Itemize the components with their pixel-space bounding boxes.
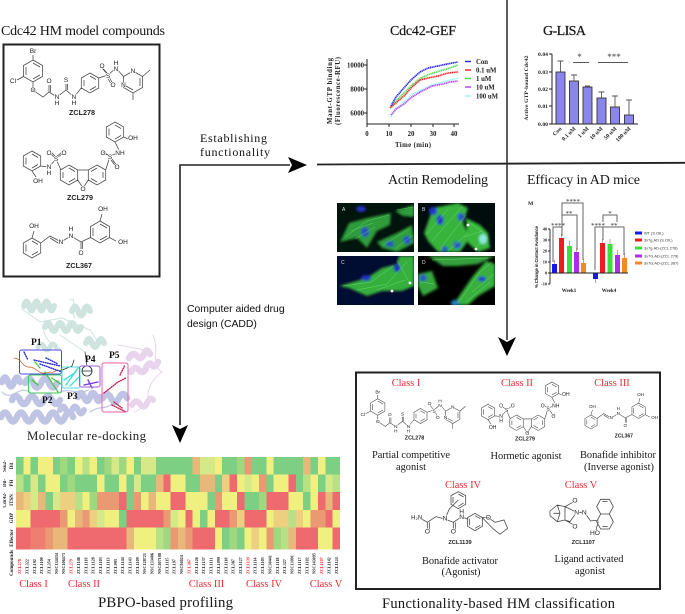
compound labels: ZCL1111 bbox=[208, 558, 214, 574]
class II: O bbox=[499, 403, 503, 409]
axis labels: 10 uM bbox=[589, 126, 605, 141]
class II: O bbox=[525, 431, 529, 437]
axes bbox=[548, 229, 628, 284]
panel: Actin Remodeling micrographs bbox=[337, 173, 495, 306]
compound labels: ZCL197 bbox=[172, 559, 177, 574]
heading: Actin Remodeling: Actin Remodeling bbox=[388, 173, 488, 188]
compound labels: ZCL1139 bbox=[245, 557, 250, 574]
protein ribbons: lower domain bbox=[1, 378, 127, 422]
molecule: ZCL279: OH bbox=[33, 178, 43, 185]
panel: functionality-based HM classification bbox=[356, 372, 660, 612]
compound labels: ZCL1118 bbox=[275, 557, 280, 574]
compound labels: NSC134434 bbox=[54, 552, 59, 574]
molecule: ZCL278: O bbox=[110, 82, 116, 89]
pocket labels: P3 bbox=[67, 392, 78, 402]
class V: N bbox=[582, 510, 587, 517]
axis labels: 10 bbox=[386, 131, 393, 138]
legend: 3x7G.AD-(ZCL 279) bbox=[644, 254, 679, 258]
molecule: ZCL278: H bbox=[72, 100, 77, 107]
class II: N bbox=[499, 414, 503, 420]
class I: Br bbox=[375, 390, 381, 396]
pocket P5 bbox=[102, 363, 128, 412]
protein ribbons: right domain bbox=[118, 335, 162, 412]
class V: O bbox=[572, 523, 578, 530]
caption: PBPO-based profiling: PBPO-based profiling bbox=[98, 595, 234, 611]
axis labels: Week4 bbox=[602, 289, 617, 294]
molecule: ZCL278: H bbox=[55, 100, 60, 107]
heading: G-LISA: G-LISA bbox=[543, 24, 587, 39]
micrograph D bbox=[418, 256, 495, 305]
heatmap row labels: Effector bbox=[10, 528, 15, 547]
class III: N bbox=[610, 415, 613, 420]
class IV: Bonafide activator bbox=[422, 556, 499, 567]
compound labels: ZCL279 bbox=[69, 559, 74, 574]
compound labels: NSC407188 bbox=[157, 553, 162, 574]
axis labels bbox=[534, 225, 617, 294]
class II: S bbox=[546, 406, 550, 412]
micrograph A: A bbox=[342, 207, 346, 213]
divider lines and downward arrow bbox=[317, 0, 685, 356]
panel: Cdc42 HM model compounds bbox=[1, 24, 165, 276]
molecule: ZCL367: OH bbox=[118, 239, 128, 246]
caption: Functionality-based HM classification: Functionality-based HM classification bbox=[382, 596, 615, 612]
compound labels: ZCL1115 bbox=[164, 557, 169, 574]
molecule: ZCL279: O bbox=[46, 150, 52, 157]
molecule: ZCL279: O bbox=[100, 150, 106, 157]
pocket labels: P2 bbox=[42, 396, 53, 406]
molecule: ZCL278: O bbox=[30, 87, 36, 94]
molecule: ZCL278: S bbox=[64, 77, 69, 84]
compound labels: ZCL1127 bbox=[238, 557, 243, 574]
compound labels: ZCL1128 bbox=[91, 557, 96, 574]
class V: agonist bbox=[575, 566, 605, 577]
molecule: ZCL278: N bbox=[55, 94, 60, 101]
compound labels: NSC13991 bbox=[290, 555, 295, 574]
legend: 3x7g.AD-(ZCL 278) bbox=[644, 246, 678, 250]
compound labels: ZCL327 bbox=[282, 559, 287, 574]
compound labels: ZCL192 bbox=[32, 559, 37, 574]
class I: N bbox=[438, 403, 442, 409]
compound labels: ZCL1109 bbox=[135, 557, 140, 574]
class III: Bonafide inhibitor bbox=[580, 450, 657, 461]
legend bbox=[465, 59, 499, 100]
axis labels: 0 bbox=[365, 131, 369, 138]
heatmap row labels bbox=[3, 460, 15, 576]
pocket labels: P4 bbox=[85, 355, 96, 365]
class IV: O bbox=[425, 528, 430, 535]
pocket P3 bbox=[62, 367, 80, 388]
compound labels: ZCL1114 bbox=[253, 557, 258, 574]
class V: N bbox=[574, 510, 579, 517]
compound labels: ZCL1119 bbox=[83, 557, 88, 574]
class II: Class II bbox=[501, 378, 534, 389]
class I: agonist bbox=[396, 462, 426, 473]
micrograph A bbox=[337, 203, 414, 252]
axis labels: 0 bbox=[545, 270, 547, 276]
compound labels: ZCL354 bbox=[46, 558, 52, 574]
class I: N bbox=[451, 405, 455, 411]
molecule: ZCL279 bbox=[23, 122, 138, 202]
molecule: ZCL279: H bbox=[47, 170, 52, 177]
heading: model compounds: Cdc42 HM model compounds bbox=[1, 24, 165, 39]
legend bbox=[635, 230, 679, 266]
compound labels: NSC133406 bbox=[150, 553, 155, 574]
compound labels: ZCL1102 bbox=[304, 557, 309, 574]
molecule: ZCL278: N bbox=[114, 66, 119, 73]
axis labels: 30 bbox=[430, 131, 437, 138]
class IV: H bbox=[459, 508, 464, 515]
significance brackets: **** bbox=[551, 222, 566, 230]
class I: O bbox=[376, 419, 380, 425]
axis labels: 6000 bbox=[350, 110, 365, 118]
label: computer aided drug design: design (CADD) bbox=[187, 319, 257, 330]
axis labels: 40 bbox=[451, 131, 458, 138]
axis labels: Week1 bbox=[562, 289, 577, 294]
compound labels: ZCL1124 bbox=[334, 556, 339, 574]
axis labels: (Fluorescence-RFU) bbox=[335, 57, 342, 125]
class IV: N bbox=[459, 514, 464, 521]
micrograph B bbox=[418, 203, 495, 252]
heatmap row labels: GDP bbox=[10, 513, 15, 523]
molecule: ZCL279: S bbox=[108, 154, 113, 161]
class I: Cl bbox=[360, 412, 365, 418]
pocket P1 bbox=[20, 350, 62, 374]
molecule: ZCL367: ZCL367 bbox=[66, 261, 92, 270]
molecule: ZCL279: O bbox=[114, 164, 120, 171]
compound labels: ZCL278 bbox=[17, 559, 22, 574]
class V bbox=[550, 480, 624, 577]
class IV: (Agonist) bbox=[442, 567, 480, 578]
compound labels: ZCL1113 bbox=[105, 557, 110, 574]
class V: ZCL1107 bbox=[572, 540, 595, 546]
class III: OH bbox=[637, 392, 644, 397]
molecule: ZCL367: H bbox=[69, 226, 74, 233]
compound labels: NSC30441 bbox=[268, 555, 272, 574]
class III: (Inverse agonist) bbox=[584, 462, 654, 473]
molecule: ZCL278: O bbox=[99, 63, 105, 70]
micrograph D: D bbox=[422, 260, 426, 266]
compound labels: NSC143095 bbox=[312, 553, 317, 574]
compound labels: ZCL1144 bbox=[120, 556, 125, 574]
molecule: ZCL278: Cl bbox=[10, 78, 17, 85]
axis labels: 1 uM bbox=[577, 126, 591, 139]
significance brackets bbox=[551, 198, 624, 270]
class II bbox=[481, 378, 570, 462]
class labels bbox=[19, 579, 343, 590]
class III: OH bbox=[589, 404, 596, 409]
class I: Partial competitive bbox=[372, 450, 450, 461]
axis labels: Time (min) bbox=[395, 142, 431, 149]
compound box frame bbox=[4, 44, 160, 276]
binding site ligand dots bbox=[14, 352, 126, 412]
axis labels: 8000 bbox=[350, 86, 365, 94]
axis labels: 0.01 bbox=[538, 104, 548, 110]
class II: NH bbox=[552, 403, 560, 409]
molecule: ZCL279: N bbox=[47, 164, 52, 171]
molecule: ZCL279: OH bbox=[128, 135, 138, 142]
axis labels: 10000 bbox=[347, 62, 365, 70]
axis labels: Con bbox=[552, 126, 564, 138]
arrow: establishing functionality bbox=[172, 157, 307, 443]
curves bbox=[390, 62, 458, 117]
significance brackets: ** bbox=[610, 222, 618, 230]
significance brackets: * bbox=[608, 210, 612, 218]
pocket labels: P5 bbox=[109, 351, 120, 361]
axis labels: 20 bbox=[543, 248, 547, 254]
axis labels: 50 uM bbox=[603, 126, 619, 141]
class IV: ZCL1139 bbox=[448, 540, 472, 546]
molecule: ZCL279: O bbox=[80, 186, 86, 193]
pocket P4 bbox=[80, 366, 100, 387]
bars bbox=[556, 72, 634, 124]
protein ribbons: top domain bbox=[22, 299, 104, 352]
molecule: ZCL367: N bbox=[69, 233, 74, 240]
molecule: ZCL367: O bbox=[78, 250, 84, 257]
caption: Molecular re-docking: Molecular re-docking bbox=[27, 429, 147, 443]
panel: molecular re-docking protein structure bbox=[1, 299, 162, 443]
significance markers: * bbox=[577, 52, 582, 62]
class III bbox=[580, 378, 658, 473]
class IV: N bbox=[443, 515, 448, 522]
class I: O bbox=[388, 412, 392, 418]
class V: HO bbox=[590, 530, 600, 537]
axis labels bbox=[327, 57, 458, 149]
class III: Class III bbox=[594, 378, 630, 389]
class IV: O bbox=[451, 528, 456, 535]
class I: H bbox=[438, 399, 442, 405]
class IV bbox=[411, 480, 508, 578]
legend: 1 uM bbox=[476, 76, 492, 83]
molecule: ZCL279: NH bbox=[115, 150, 125, 157]
micrograph B: B bbox=[422, 207, 426, 213]
significance brackets: ** bbox=[566, 210, 573, 218]
axes bbox=[364, 59, 459, 127]
compound labels: ZCL1103 bbox=[98, 557, 103, 574]
panel letter M: M bbox=[528, 201, 534, 207]
pocket labels bbox=[31, 338, 120, 406]
class II: OH bbox=[489, 425, 497, 431]
legend: WT (S.OIL) bbox=[644, 230, 664, 236]
legend: 3x7g.AD (S.OIL) bbox=[644, 238, 673, 242]
molecule: ZCL278: H bbox=[114, 60, 119, 67]
class V: O bbox=[572, 497, 578, 504]
class labels: Class III bbox=[189, 579, 225, 590]
class II: S bbox=[505, 408, 509, 414]
class V: Class V bbox=[565, 480, 598, 491]
heading: Efficacy in AD mice: Efficacy in AD mice bbox=[527, 173, 640, 188]
axis labels: 30 bbox=[543, 238, 547, 242]
class III: O bbox=[624, 423, 628, 428]
significance markers bbox=[573, 52, 628, 62]
micrograph C: C bbox=[341, 260, 345, 266]
class II: O bbox=[511, 403, 515, 409]
bars bbox=[552, 234, 627, 283]
heatmap row labels: Cdc42- bbox=[3, 492, 8, 508]
axis labels: Mant-GTP binding bbox=[327, 57, 334, 124]
significance brackets: **** bbox=[566, 198, 580, 206]
heading: Cdc42-GEF: Cdc42-GEF bbox=[390, 24, 456, 39]
molecule: ZCL278: O bbox=[46, 78, 52, 85]
compound labels: ZCL1099 bbox=[216, 557, 221, 574]
class I: N bbox=[444, 415, 448, 421]
panel: Efficacy in AD mice chart bbox=[527, 173, 679, 294]
axes bbox=[549, 54, 638, 124]
significance brackets: **** bbox=[591, 222, 606, 230]
compound labels: ZCL1117 bbox=[297, 557, 302, 574]
class IV: O bbox=[486, 515, 491, 522]
class I: O bbox=[436, 415, 440, 421]
heatmap row labels: ITSN bbox=[10, 494, 15, 506]
legend: 10 uM bbox=[476, 84, 495, 92]
class II: OH bbox=[562, 392, 570, 398]
molecule: ZCL278: N bbox=[121, 82, 126, 89]
class III: N bbox=[617, 411, 620, 416]
classification box frame bbox=[356, 372, 660, 589]
heatmap row labels: Dil bbox=[10, 462, 15, 469]
class IV: Class IV bbox=[445, 480, 482, 491]
class labels: Class IV bbox=[246, 579, 283, 590]
molecule: ZCL278 bbox=[10, 48, 150, 117]
axis labels: 0.04 bbox=[538, 52, 548, 58]
compound labels: ZCL1110 bbox=[223, 557, 228, 574]
molecule: ZCL278: N bbox=[72, 94, 77, 101]
heatmap row labels: Dil- bbox=[3, 479, 8, 487]
pocket labels: P1 bbox=[31, 338, 42, 348]
label: Establishing functionality: functionality bbox=[200, 145, 270, 159]
molecule: ZCL278: Br bbox=[30, 48, 37, 55]
class I: N bbox=[394, 424, 398, 430]
heatmap row labels: Ssu2- bbox=[3, 460, 8, 472]
axis labels bbox=[524, 52, 633, 143]
molecule: ZCL367: OH bbox=[29, 223, 39, 230]
compound labels: ZCL387 bbox=[231, 559, 236, 574]
class labels: Class V bbox=[310, 579, 343, 590]
axis labels: 0.00 bbox=[538, 122, 548, 128]
class I: O bbox=[428, 401, 432, 407]
significance markers: *** bbox=[607, 52, 621, 62]
pocket P2 bbox=[28, 375, 62, 393]
axis labels: 20 bbox=[408, 131, 415, 138]
class I bbox=[360, 378, 466, 473]
error bars bbox=[558, 61, 632, 115]
compound labels: ZCL1126 bbox=[194, 557, 199, 574]
compound labels: ZCL1105 bbox=[260, 557, 265, 574]
class II: ZCL279 bbox=[515, 436, 535, 442]
panel: PBPO-based profiling heatmap bbox=[3, 457, 343, 611]
micrograph C bbox=[337, 256, 414, 305]
label: computer aided drug design: Computer aided drug bbox=[187, 304, 285, 315]
axis labels: % Change in Contact Avoidance bbox=[534, 225, 539, 288]
compound labels bbox=[17, 552, 339, 574]
class I: Class I bbox=[392, 378, 421, 389]
axis labels: 0.1 uM bbox=[561, 126, 578, 142]
class I: H bbox=[407, 429, 411, 435]
legend: 0.1 uM bbox=[476, 68, 497, 74]
axis labels: 0.02 bbox=[538, 87, 548, 93]
molecule: ZCL367 bbox=[23, 206, 128, 270]
class III: OH bbox=[651, 415, 658, 420]
axis labels: 0.03 bbox=[538, 70, 548, 76]
class labels: Class I bbox=[19, 579, 48, 590]
compound labels: ZCL1100 bbox=[39, 557, 44, 574]
molecule: ZCL279: S bbox=[54, 156, 59, 163]
heatmap row labels: Compounds bbox=[10, 550, 15, 576]
compound labels: ZCL1143 bbox=[128, 557, 132, 574]
molecule: ZCL279: ZCL279 bbox=[67, 193, 93, 202]
class I: H bbox=[394, 429, 398, 435]
compound labels: ZCL367 bbox=[186, 559, 191, 574]
compound labels: ZCL1148 bbox=[76, 557, 81, 574]
molecule: ZCL278: ZCL278 bbox=[69, 108, 95, 117]
class IV: H₂N bbox=[411, 516, 422, 522]
compound labels: NSC94024 bbox=[179, 554, 184, 574]
molecule: ZCL279: O bbox=[61, 150, 67, 157]
molecule: ZCL367: OH bbox=[98, 206, 108, 213]
class III: ZCL367 bbox=[615, 433, 633, 439]
molecule: ZCL278: S bbox=[106, 73, 111, 80]
label: Establishing functionality: Establishing bbox=[200, 131, 267, 145]
compound labels: NSC128721 bbox=[142, 553, 147, 574]
heatmap bbox=[16, 457, 340, 549]
legend: 3x7G.AD-(ZCL 367) bbox=[644, 260, 679, 266]
class I: N bbox=[407, 424, 411, 430]
axis labels: 10 bbox=[543, 260, 547, 264]
class I: S bbox=[401, 411, 405, 417]
axis labels: -10 bbox=[541, 282, 547, 286]
class I: S bbox=[432, 408, 436, 414]
axis labels: Active GTP-bound Cdc42 bbox=[524, 55, 530, 120]
heatmap row labels: PH bbox=[10, 479, 15, 486]
compound labels: ZCL993 bbox=[113, 559, 118, 574]
molecule: ZCL367: N bbox=[59, 239, 64, 246]
class II: O bbox=[552, 414, 556, 420]
legend: Con bbox=[476, 59, 488, 66]
class V: Ligand activated bbox=[554, 554, 624, 565]
molecule: ZCL278: N bbox=[131, 68, 136, 75]
class I: ZCL278 bbox=[405, 435, 424, 441]
compound labels: ZCL322 bbox=[24, 559, 29, 574]
class III: H bbox=[617, 406, 620, 411]
panel: G-LISA bar chart bbox=[524, 24, 638, 143]
axis labels: 40 bbox=[543, 226, 547, 232]
compound labels: ZCL1137 bbox=[201, 557, 206, 574]
compound labels: ZCL1142 bbox=[326, 557, 331, 574]
compound labels: ZCL1107 bbox=[319, 557, 324, 574]
axis labels: 100 uM bbox=[615, 126, 633, 143]
legend: 100 uM bbox=[476, 94, 499, 100]
class II: H bbox=[499, 419, 503, 425]
class II: Hormetic agonist bbox=[490, 451, 562, 462]
class II: O bbox=[541, 403, 545, 409]
panel: Cdc42-GEF line chart bbox=[327, 24, 499, 149]
compound labels: NSC106473 bbox=[61, 553, 66, 574]
class labels: Class II bbox=[68, 579, 101, 590]
